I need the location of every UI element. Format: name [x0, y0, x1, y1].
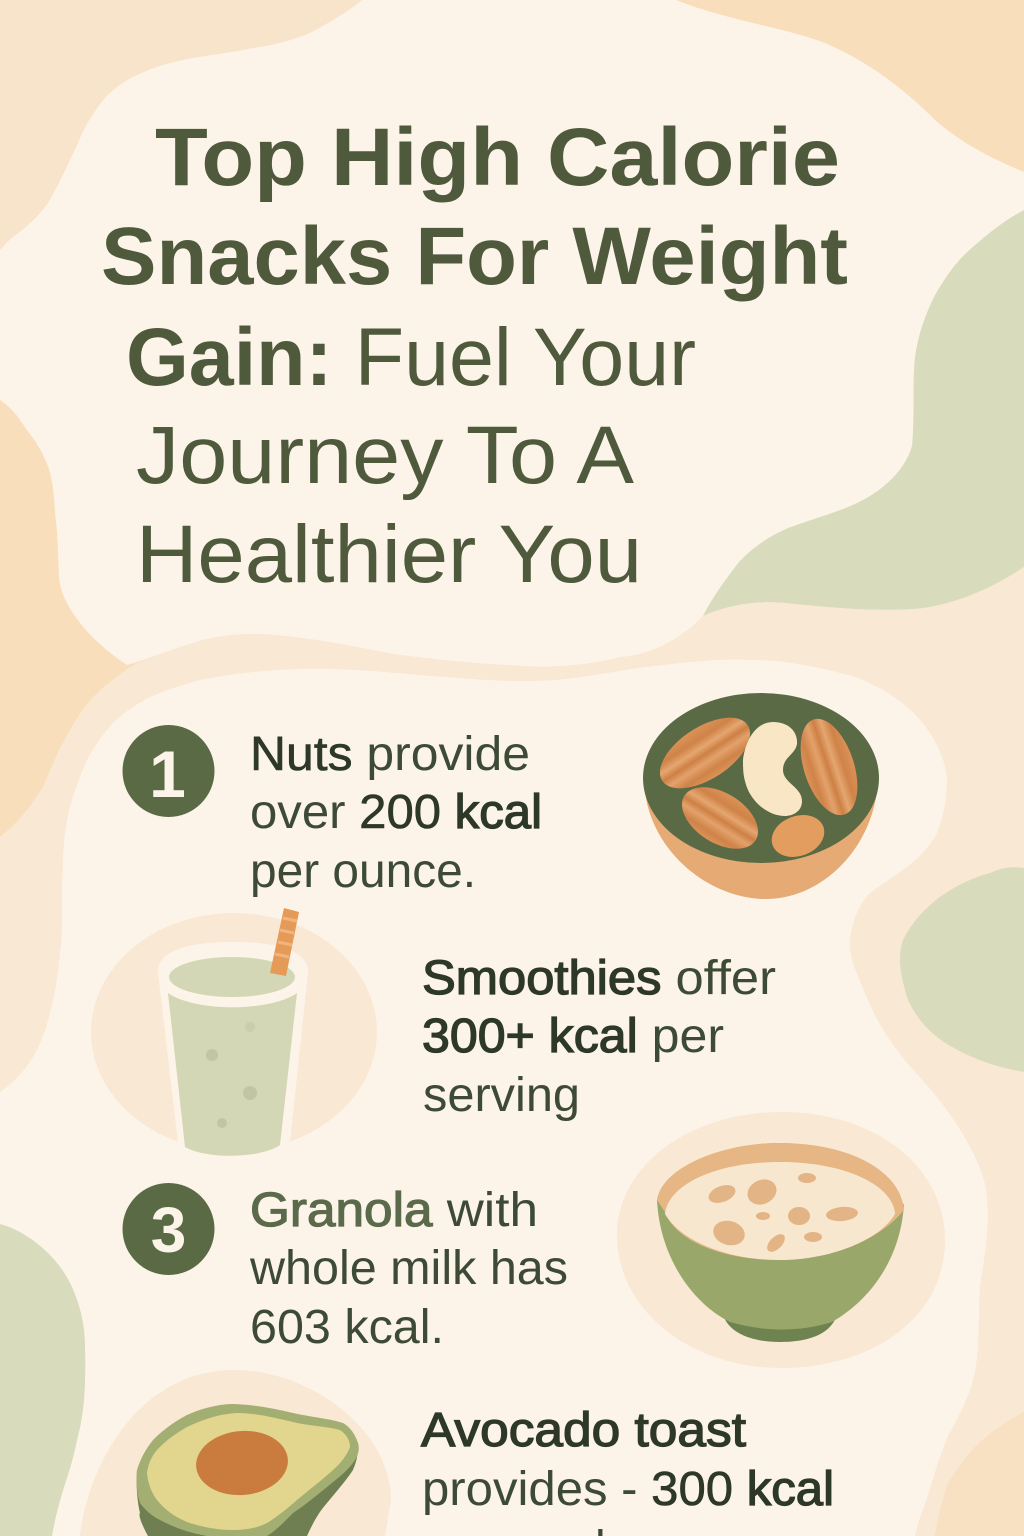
icon backdrop blob — [617, 1112, 945, 1368]
avocado toast text: provides - 300 kcal — [422, 1463, 834, 1516]
smoothies text: serving — [423, 1069, 580, 1122]
number badge 1: 1 — [149, 737, 186, 811]
avocado toast text: Avocado toast — [421, 1404, 746, 1457]
title: Gain: Fuel Your — [126, 312, 696, 403]
title: Healthier You — [136, 509, 642, 600]
item 2: smoothies — [91, 908, 776, 1156]
number badge 3 — [122, 1183, 214, 1275]
nuts text: Nuts provide — [250, 728, 530, 781]
nuts text: per ounce. — [250, 845, 476, 898]
nuts text — [250, 728, 542, 898]
icon: granola bowl — [657, 1143, 904, 1342]
icon: bowl of nuts — [643, 693, 879, 899]
avocado toast text — [421, 1404, 834, 1536]
item 1: nuts — [122, 693, 879, 899]
smoothies text: Smoothies offer — [422, 952, 776, 1005]
nuts text: over 200 kcal — [250, 786, 542, 839]
granola text: 603 kcal. — [250, 1301, 444, 1354]
title: Top High Calorie — [155, 112, 840, 203]
item 4: avocado toast — [80, 1370, 834, 1536]
icon: avocado half — [137, 1404, 359, 1536]
granola text: Granola with — [250, 1184, 538, 1237]
number badge 3: 3 — [151, 1194, 186, 1266]
icon: smoothie glass — [158, 908, 308, 1156]
granola text — [249, 1184, 568, 1354]
number badge 1 — [122, 725, 214, 817]
smoothies text: 300+ kcal per — [422, 1010, 724, 1063]
title: Snacks For Weight — [101, 211, 848, 302]
title: Journey To A — [136, 410, 634, 501]
icon backdrop circle — [91, 913, 377, 1151]
item 3: granola — [122, 1112, 945, 1368]
granola text: whole milk has — [249, 1242, 568, 1295]
title — [101, 112, 848, 600]
icon backdrop blob — [80, 1370, 391, 1536]
smoothies text — [422, 952, 776, 1122]
